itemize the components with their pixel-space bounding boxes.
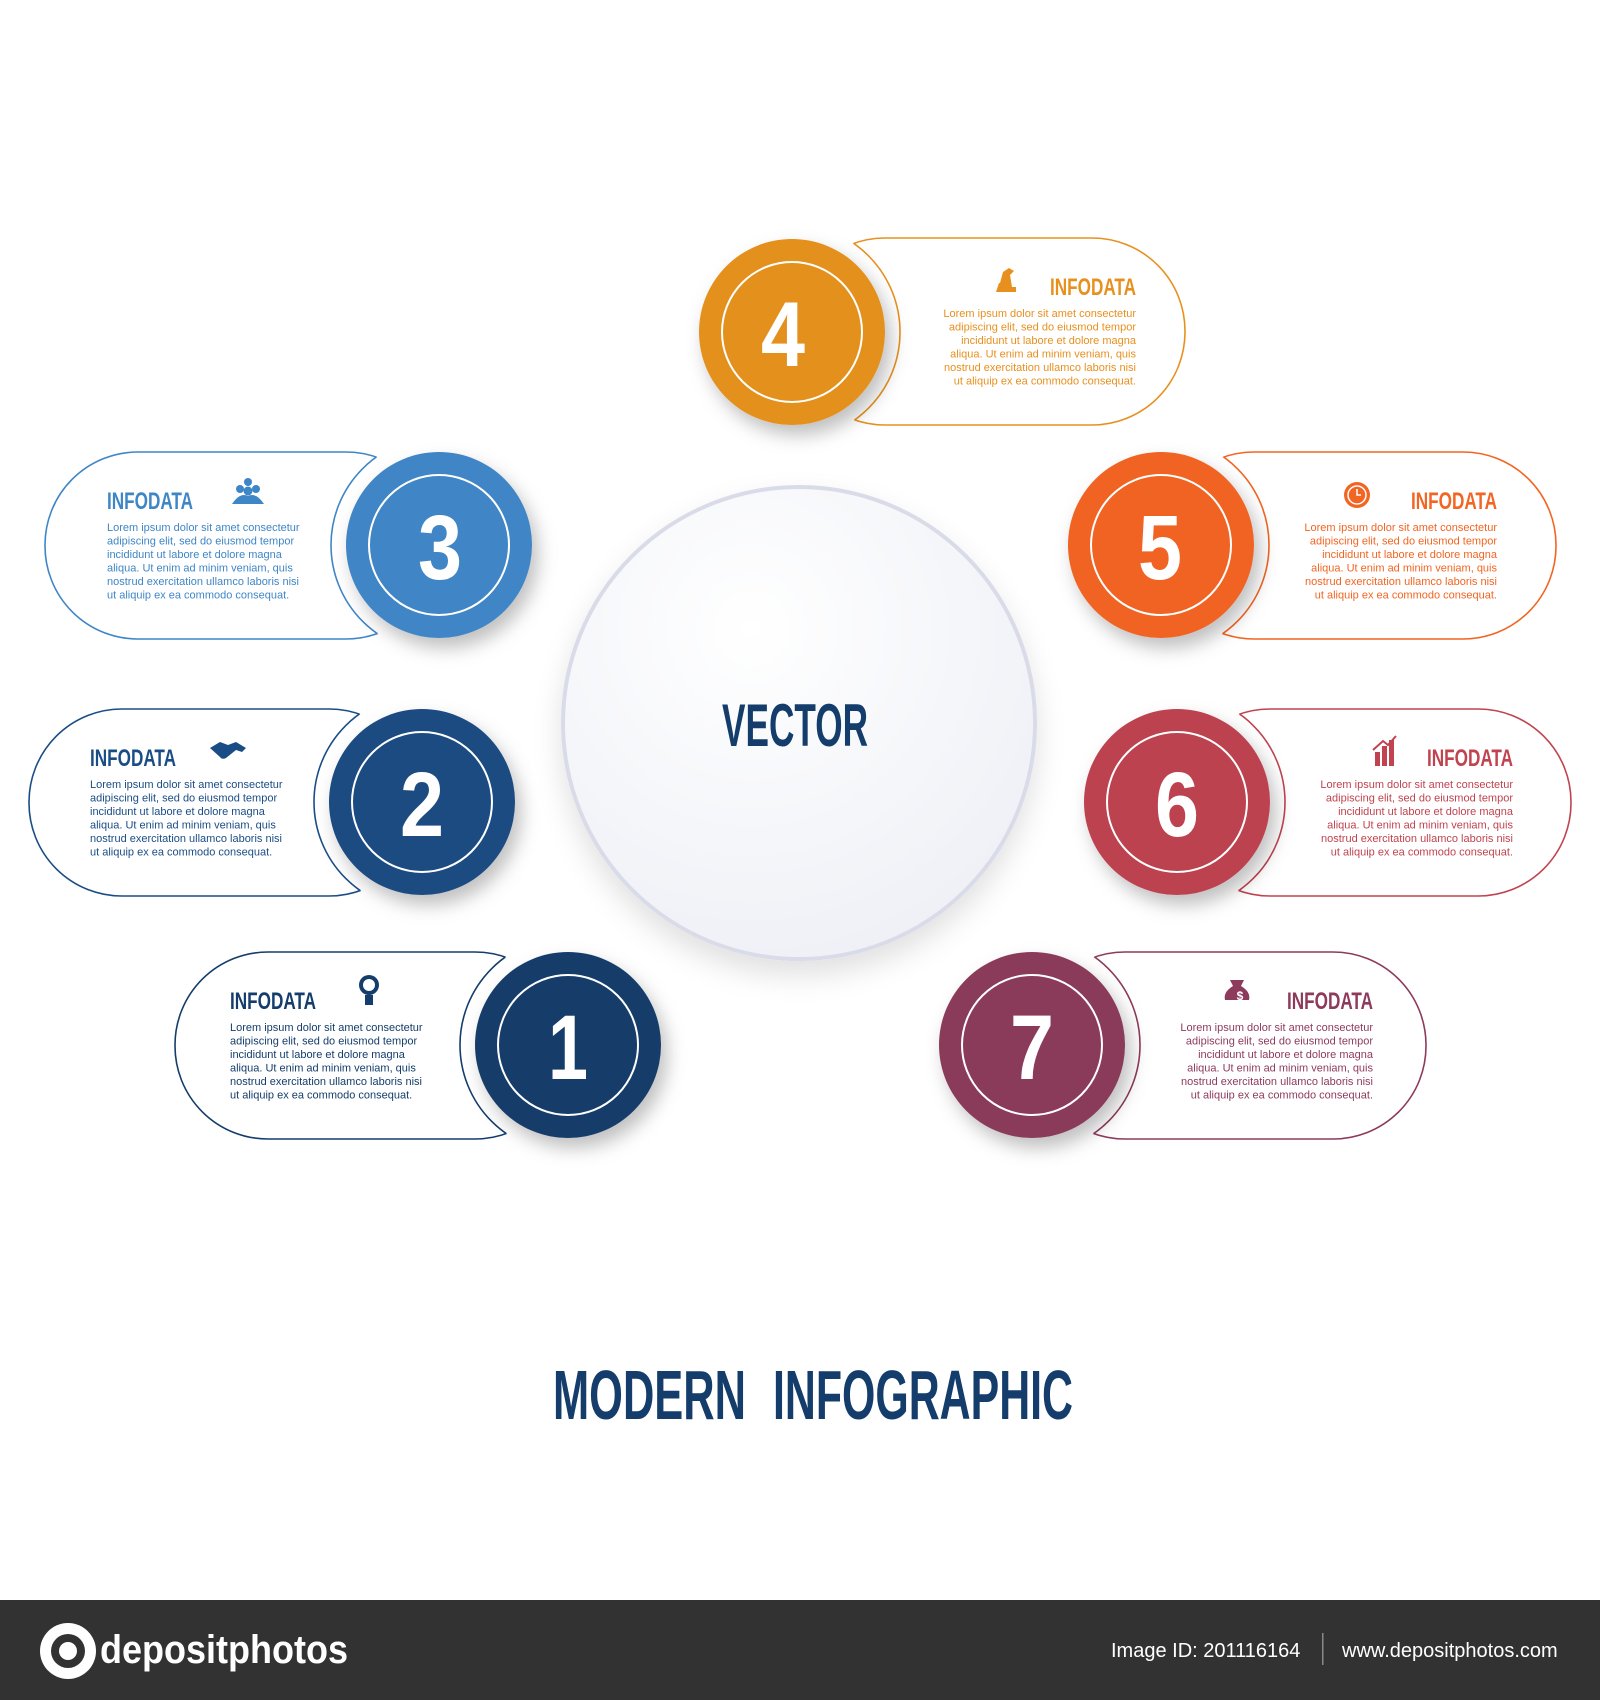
number circle 2 bbox=[329, 709, 515, 895]
footer logo bbox=[40, 1623, 348, 1679]
item 6: adipiscing elit, sed do eiusmod tempor bbox=[1326, 792, 1513, 804]
item 2 bbox=[29, 694, 530, 910]
item 6: nostrud exercitation ullamco laboris nisi bbox=[1321, 833, 1513, 845]
number circle 7: 7 bbox=[1010, 997, 1054, 1099]
title: MODERN INFOGRAPHIC: INFOGRAPHIC bbox=[773, 1356, 1073, 1434]
number circle 2: 2 bbox=[400, 754, 444, 856]
icon 3: people bbox=[232, 478, 264, 504]
item 2: adipiscing elit, sed do eiusmod tempor bbox=[90, 792, 277, 804]
item 3 bbox=[45, 437, 547, 653]
number circle 1 bbox=[475, 952, 661, 1138]
item 1: Lorem ipsum dolor sit amet consectetur bbox=[230, 1022, 423, 1034]
item 3: nostrud exercitation ullamco laboris nisi bbox=[107, 576, 299, 588]
item 3: incididunt ut labore et dolore magna bbox=[107, 549, 283, 561]
number circle 3: 3 bbox=[418, 497, 462, 599]
number circle 4 bbox=[699, 239, 885, 425]
item 1 bbox=[175, 937, 676, 1153]
footer url: www.depositphotos.com bbox=[1341, 1640, 1558, 1662]
center circle bbox=[563, 487, 1035, 959]
item 7: Lorem ipsum dolor sit amet consectetur bbox=[1180, 1022, 1373, 1034]
item 4: incididunt ut labore et dolore magna bbox=[961, 335, 1137, 347]
center label: VECTOR: VECTOR bbox=[722, 692, 868, 759]
title: MODERN INFOGRAPHIC: MODERN bbox=[553, 1356, 746, 1434]
item 5: ut aliquip ex ea commodo consequat. bbox=[1315, 590, 1497, 602]
item 1: adipiscing elit, sed do eiusmod tempor bbox=[230, 1036, 417, 1048]
item 4: aliqua. Ut enim ad minim veniam, quis bbox=[950, 348, 1136, 360]
number circle 5 bbox=[1068, 452, 1254, 638]
item 7: ut aliquip ex ea commodo consequat. bbox=[1191, 1090, 1373, 1102]
item 7: INFODATA bbox=[1287, 988, 1373, 1015]
item 5 bbox=[1053, 437, 1556, 653]
item 4: ut aliquip ex ea commodo consequat. bbox=[954, 376, 1136, 388]
item 6: INFODATA bbox=[1427, 745, 1513, 772]
number circle 1: 1 bbox=[548, 997, 588, 1099]
item 4: nostrud exercitation ullamco laboris nisi bbox=[944, 362, 1136, 374]
item 3: INFODATA bbox=[107, 488, 193, 515]
item 4 bbox=[684, 224, 1185, 440]
item 6: incididunt ut labore et dolore magna bbox=[1338, 806, 1514, 818]
item 1: aliqua. Ut enim ad minim veniam, quis bbox=[230, 1062, 416, 1074]
icon 1: lightbulb bbox=[359, 975, 379, 1005]
item 2: Lorem ipsum dolor sit amet consectetur bbox=[90, 779, 283, 791]
item 5: Lorem ipsum dolor sit amet consectetur bbox=[1304, 522, 1497, 534]
item 2: ut aliquip ex ea commodo consequat. bbox=[90, 846, 272, 858]
number circle 4: 4 bbox=[761, 284, 805, 386]
item 7: adipiscing elit, sed do eiusmod tempor bbox=[1186, 1036, 1373, 1048]
footer logo: depositphotos bbox=[100, 1628, 348, 1672]
icon 4 bbox=[996, 268, 1016, 292]
item 2: nostrud exercitation ullamco laboris nisi bbox=[90, 833, 282, 845]
item 2: incididunt ut labore et dolore magna bbox=[90, 806, 266, 818]
number circle 5: 5 bbox=[1138, 497, 1182, 599]
item 1: incididunt ut labore et dolore magna bbox=[230, 1049, 406, 1061]
number circle 6 bbox=[1084, 709, 1270, 895]
item 1: ut aliquip ex ea commodo consequat. bbox=[230, 1090, 412, 1102]
item 7 bbox=[924, 937, 1426, 1153]
number circle 6: 6 bbox=[1155, 754, 1199, 856]
item 5: nostrud exercitation ullamco laboris nisi bbox=[1305, 576, 1497, 588]
item 3: ut aliquip ex ea commodo consequat. bbox=[107, 590, 289, 602]
icon 7: money bag bbox=[1225, 980, 1249, 1003]
item 4: Lorem ipsum dolor sit amet consectetur bbox=[943, 308, 1136, 320]
footer image id: Image ID: 201116164 bbox=[1111, 1640, 1300, 1662]
number circle 7 bbox=[939, 952, 1125, 1138]
item 5: adipiscing elit, sed do eiusmod tempor bbox=[1310, 536, 1497, 548]
item 5: incididunt ut labore et dolore magna bbox=[1322, 549, 1498, 561]
item 7: nostrud exercitation ullamco laboris nisi bbox=[1181, 1076, 1373, 1088]
item 1: INFODATA bbox=[230, 988, 316, 1015]
item 6: Lorem ipsum dolor sit amet consectetur bbox=[1320, 779, 1513, 791]
icon 6: chart bbox=[1373, 736, 1396, 766]
item 6: aliqua. Ut enim ad minim veniam, quis bbox=[1327, 820, 1513, 832]
item 2: INFODATA bbox=[90, 745, 176, 772]
item 4: INFODATA bbox=[1050, 274, 1136, 301]
item 7: aliqua. Ut enim ad minim veniam, quis bbox=[1187, 1062, 1373, 1074]
title: MODERN INFOGRAPHIC bbox=[553, 1356, 1073, 1434]
footer bar bbox=[0, 1600, 1600, 1700]
item 4: adipiscing elit, sed do eiusmod tempor bbox=[949, 322, 1136, 334]
item 6: ut aliquip ex ea commodo consequat. bbox=[1331, 846, 1513, 858]
item 2: aliqua. Ut enim ad minim veniam, quis bbox=[90, 820, 276, 832]
item 1: nostrud exercitation ullamco laboris nisi bbox=[230, 1076, 422, 1088]
item 5: INFODATA bbox=[1411, 488, 1497, 515]
item 6 bbox=[1069, 694, 1571, 910]
item 3: aliqua. Ut enim ad minim veniam, quis bbox=[107, 562, 293, 574]
item 5: aliqua. Ut enim ad minim veniam, quis bbox=[1311, 562, 1497, 574]
item 3: Lorem ipsum dolor sit amet consectetur bbox=[107, 522, 300, 534]
icon 7: money bag: $ bbox=[1237, 989, 1244, 1003]
icon 5: clock bbox=[1344, 482, 1370, 508]
icon 2: handshake bbox=[210, 742, 246, 759]
item 3: adipiscing elit, sed do eiusmod tempor bbox=[107, 536, 294, 548]
number circle 3 bbox=[346, 452, 532, 638]
item 7: incididunt ut labore et dolore magna bbox=[1198, 1049, 1374, 1061]
